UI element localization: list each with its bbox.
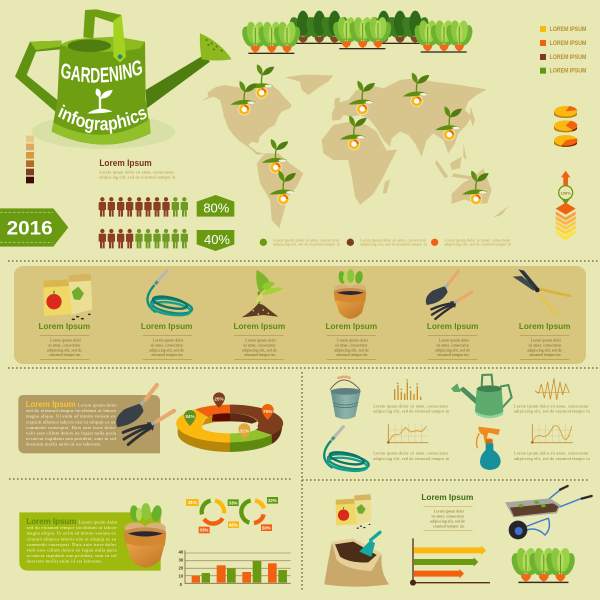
heading and text: lorem ipsum: Lorem ipsum dolor sit amet, consectetur: [99, 169, 175, 175]
chart: two donut rings: 33%: [200, 528, 208, 533]
chart: bar chart: 40: [179, 550, 184, 555]
icon: small seed packets: [336, 494, 372, 529]
item: trowel and fork: Lorem Ipsum: [427, 321, 479, 331]
pin 25%: 25%: [214, 397, 225, 402]
panel: gardening tools row: [14, 266, 586, 364]
text: hose caption: [373, 451, 450, 462]
map legend: adipiscing elit, sed do eiusmod tempor in: [360, 243, 427, 248]
chart: bar chart: [179, 550, 291, 587]
map legend: Lorem ipsum dolor sit amet, consectetur: [444, 238, 511, 243]
illustration: carrots: [509, 547, 578, 583]
colour legend: [540, 26, 586, 75]
chart: two donut rings: 22%: [268, 498, 277, 503]
colour legend: LOREM IPSUM: [550, 69, 586, 75]
item: garden shears: sit amet, consectetur: [528, 342, 562, 348]
map legend: Lorem ipsum dolor sit amet, consectetur: [273, 238, 340, 243]
item: flower pot: eiusmod tempor inc: [336, 352, 368, 357]
panel: green text box with pot: occaecat cupidatat non proident, sunt in cul: [27, 553, 117, 559]
panel: text box with tools: commodo consequat. Duis aute irure dolor: [26, 425, 116, 430]
item: seed packets: Lorem ipsum dolor: [50, 338, 82, 343]
pin 84%: 84%: [185, 414, 196, 419]
item: seed packets: eiusmod tempor inc: [49, 352, 81, 357]
item: sprout in soil: Lorem ipsum dolor: [245, 338, 277, 343]
heading and text: lorem ipsum: sit amet, consectetur: [431, 513, 465, 519]
world map: [202, 75, 508, 228]
text: bucket caption: Lorem ipsum dolor sit amet, consectetur: [373, 403, 449, 409]
text: spray caption: Lorem ipsum dolor sit amet, consectetur: [514, 451, 589, 457]
heading and text: lorem ipsum: Lorem Ipsum: [99, 158, 152, 168]
panel: green text box with pot: Lorem ipsum dolor: [79, 519, 118, 524]
item: garden shears: Lorem Ipsum: [519, 321, 571, 331]
panel: text box with tools: occaecat cupidatat non proident, sunt in cul: [26, 436, 117, 442]
chart: bar chart: 30: [179, 557, 184, 562]
item: garden hose: Lorem Ipsum: [141, 321, 193, 331]
panel: green text box with pot: magna aliqua. Ut enim ad minim veniam ex: [27, 531, 117, 536]
panel: green text box with pot: commodo consequat. Duis aute irure dolor: [27, 542, 116, 547]
colour legend: LOREM IPSUM: [550, 27, 586, 33]
item: sprout in soil: eiusmod tempor inc: [244, 352, 276, 357]
chart: small zigzag: [535, 378, 569, 400]
icon: spray bottle: [477, 427, 501, 470]
year banner 2016: 2016: [7, 218, 53, 239]
item: trowel and fork: sit amet, consectetur: [436, 342, 470, 348]
text: hose caption: Lorem ipsum dolor sit amet, consectetur: [373, 451, 449, 457]
people chart 40 percent: [99, 229, 234, 251]
colour swatches: [26, 136, 34, 183]
item: trowel and fork: adipiscing elit, sed do: [435, 347, 470, 353]
colour legend: LOREM IPSUM: [550, 55, 586, 61]
people chart 80 percent: 80%: [203, 202, 229, 216]
item: seed packets: sit amet, consectetur: [48, 342, 81, 348]
map legend: Lorem ipsum dolor sit amet, consectetur: [360, 238, 427, 243]
item: flower pot: [325, 269, 377, 359]
text: bucket caption: adipiscing elit, sed do eiusmod tempor in: [373, 409, 450, 415]
item: garden shears: Lorem ipsum dolor: [531, 338, 562, 343]
chart: two donut rings: [186, 497, 278, 533]
text: spray caption: adipiscing elit, sed do eiusmod tempor in: [514, 456, 591, 462]
icon: soil sack with scoop: [324, 532, 389, 587]
chart: bar chart: 20: [179, 566, 184, 571]
icon: coiled hose: [324, 427, 370, 473]
heading and text: lorem ipsum: Lorem Ipsum: [421, 492, 474, 502]
item: trowel and fork: [426, 271, 479, 359]
people chart 80 percent: [99, 195, 234, 217]
heading and text: lorem ipsum: adipiscing elit, sed do eiusmod tempor in: [99, 175, 175, 181]
item: garden hose: Lorem ipsum dolor: [153, 338, 184, 343]
panel: green text box with pot: velit esse cillum dolore eu fugiat nulla paria: [27, 547, 117, 552]
text: watering can caption: Lorem ipsum dolor sit amet, consectetur: [514, 403, 589, 409]
icon: bucket: [330, 377, 361, 419]
item: garden shears: adipiscing elit, sed do: [527, 347, 562, 353]
item: garden shears: eiusmod tempor inc: [530, 352, 561, 357]
people chart 40 percent: 40%: [204, 233, 230, 247]
heading and text: lorem ipsum: [421, 492, 474, 531]
icon: wheelbarrow: [505, 486, 592, 539]
arrow 100 percent stack: 100%: [561, 190, 571, 195]
panel: text box with tools: sed do eiusmod tempor incididunt ut labore: [26, 408, 116, 413]
map legend: [260, 238, 511, 248]
panel: text box with tools: [18, 385, 174, 453]
heading and text: lorem ipsum: Lorem ipsum dolor: [434, 509, 465, 514]
pin 76%: 76%: [263, 409, 273, 414]
text: watering can caption: [514, 403, 591, 415]
heading and text: lorem ipsum: [99, 158, 175, 181]
chart: line chart one: [387, 424, 428, 444]
item: flower pot: sit amet, consectetur: [335, 342, 368, 348]
chart: bar chart: 0: [180, 582, 183, 587]
item: seed packets: adipiscing elit, sed do: [47, 347, 82, 353]
chart: two donut rings: 31%: [188, 500, 197, 505]
panel: green text box with pot: [19, 503, 166, 571]
item: sprout in soil: Lorem Ipsum: [233, 321, 285, 331]
item: seed packets: [38, 273, 92, 359]
item: flower pot: Lorem ipsum dolor: [337, 338, 369, 343]
map legend: adipiscing elit, sed do eiusmod tempor in: [273, 243, 340, 248]
panel: text box with tools: deserunt mollit anim id est laborum.: [26, 442, 101, 447]
panel: text box with tools: velit esse cillum dolore eu fugiat nulla paria: [26, 430, 116, 435]
item: garden hose: eiusmod tempor inc: [152, 352, 183, 357]
chart: small bar dots: [394, 379, 421, 400]
item: trowel and fork: eiusmod tempor inc: [438, 352, 469, 357]
item: sprout in soil: adipiscing elit, sed do: [242, 347, 277, 353]
panel: green text box with pot: Lorem Ipsum: [26, 517, 76, 526]
chart: two donut rings: 33%: [229, 500, 237, 505]
item: seed packets: Lorem Ipsum: [38, 321, 90, 331]
item: flower pot: Lorem Ipsum: [325, 321, 377, 331]
3d pie charts: [554, 106, 578, 147]
illustration: watering can title: [15, 9, 232, 149]
chart: arrow bars: [410, 538, 490, 586]
item: sprout in soil: sit amet, consectetur: [243, 342, 276, 348]
text: hose caption: adipiscing elit, sed do eiusmod tempor in: [373, 456, 450, 462]
title: infographics: infographics: [58, 104, 147, 134]
chart: two donut rings: 48%: [229, 522, 238, 527]
chart: bar chart: 10: [179, 574, 184, 579]
item: garden shears: [513, 269, 571, 359]
title: gardening: GARDENING: [61, 60, 142, 83]
heading and text: lorem ipsum: eiusmod tempor inc: [433, 523, 465, 528]
text: spray caption: [514, 451, 591, 462]
map markers with sprouts: [230, 64, 489, 205]
chart: 3d ring with pins: [176, 392, 283, 452]
panel: text box with tools: citation ullamco laboris nisi ut aliquip ex ea: [26, 419, 115, 424]
panel: green text box with pot: deserunt mollit anim id est laborum.: [27, 559, 102, 564]
year banner 2016: [0, 208, 68, 247]
item: trowel and fork: Lorem ipsum dolor: [439, 338, 470, 343]
chart: line chart two: [531, 424, 573, 444]
item: flower pot: adipiscing elit, sed do: [334, 347, 369, 353]
section dividers: [8, 261, 600, 590]
carrot rows: [240, 11, 475, 54]
icon: white sprout: [87, 88, 113, 113]
text: bucket caption: [373, 403, 450, 415]
panel: text box with tools: Lorem ipsum dolor: [78, 402, 117, 407]
colour legend: LOREM IPSUM: [550, 41, 586, 47]
text: watering can caption: adipiscing elit, sed do eiusmod tempor in: [514, 409, 591, 415]
pin 32%: 32%: [240, 428, 250, 433]
chart: two donut rings: 50%: [262, 525, 271, 530]
item: garden hose: adipiscing elit, sed do: [149, 347, 184, 353]
item: sprout in soil: [233, 270, 285, 359]
item: garden hose: [141, 271, 193, 359]
arrow 100 percent stack: [556, 171, 576, 241]
icon: small watering can: [451, 375, 512, 418]
panel: green text box with pot: sed do eiusmod tempor incididunt ut labore: [27, 525, 117, 530]
heading and text: lorem ipsum: adipiscing elit, sed do: [430, 518, 465, 524]
panel: green text box with pot: citation ullamco laboris nisi ut aliquip ex ea: [27, 536, 116, 541]
panel: text box with tools: Lorem Ipsum: [26, 400, 76, 409]
title: gardening: [61, 60, 142, 83]
panel: text box with tools: magna aliqua. Ut enim ad minim veniam ex: [26, 414, 116, 419]
map legend: adipiscing elit, sed do eiusmod tempor in: [444, 243, 511, 248]
item: garden hose: sit amet, consectetur: [150, 342, 184, 348]
